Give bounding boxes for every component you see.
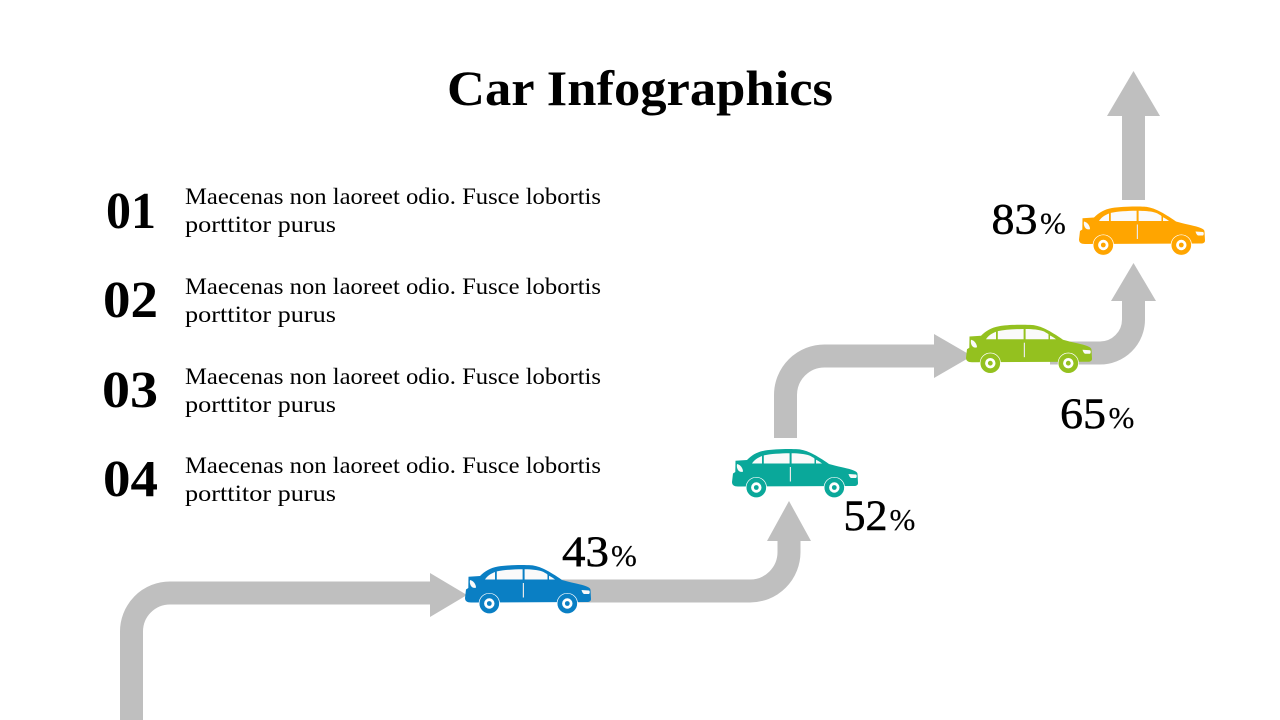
label: 65%: % <box>1108 400 1134 435</box>
label: 43% <box>562 529 637 576</box>
label: 83%: % <box>1040 206 1066 240</box>
item 02: porttitor purus <box>185 302 336 327</box>
label: 43%: 43 <box>562 529 609 576</box>
arrow: final segment <box>1107 71 1160 200</box>
label: 52% <box>844 493 915 540</box>
item 02: Maecenas non laoreet odio. Fusce lobortis <box>185 274 601 299</box>
icon: blue car <box>465 565 591 614</box>
arrow: segment 4 <box>1050 263 1156 353</box>
arrow: segment 1 <box>131 573 467 720</box>
item 04: Maecenas non laoreet odio. Fusce lobortis <box>185 453 601 478</box>
item 04: 04 <box>103 451 158 508</box>
label: 65% <box>1060 391 1134 438</box>
icon: teal car <box>732 449 858 498</box>
item 01: Maecenas non laoreet odio. Fusce lobortis <box>185 184 601 209</box>
item 02: 02 <box>103 272 158 329</box>
label: 65%: 65 <box>1060 391 1106 438</box>
label: 52%: 52 <box>844 493 888 540</box>
label: 83% <box>992 196 1066 244</box>
item 03: 03 <box>102 362 158 419</box>
item 03: Maecenas non laoreet odio. Fusce lobortis <box>185 364 601 389</box>
item 01: 01 <box>106 183 156 240</box>
icon: green car <box>966 325 1092 373</box>
label: 52%: % <box>890 502 915 537</box>
item 03: porttitor purus <box>185 392 336 417</box>
arrow: segment 2 <box>560 501 811 591</box>
item 03 <box>102 362 601 419</box>
item 01: porttitor purus <box>185 212 336 237</box>
item 01 <box>106 183 601 240</box>
list: numbered items <box>102 183 601 508</box>
label: 83%: 83 <box>992 196 1038 244</box>
label: 43%: % <box>611 538 637 573</box>
icon: orange car <box>1079 207 1205 255</box>
item 04 <box>103 451 601 508</box>
item 04: porttitor purus <box>185 481 336 506</box>
title: Car Infographics <box>447 60 833 116</box>
arrow: segment 3 <box>786 334 972 438</box>
item 02 <box>103 272 601 329</box>
